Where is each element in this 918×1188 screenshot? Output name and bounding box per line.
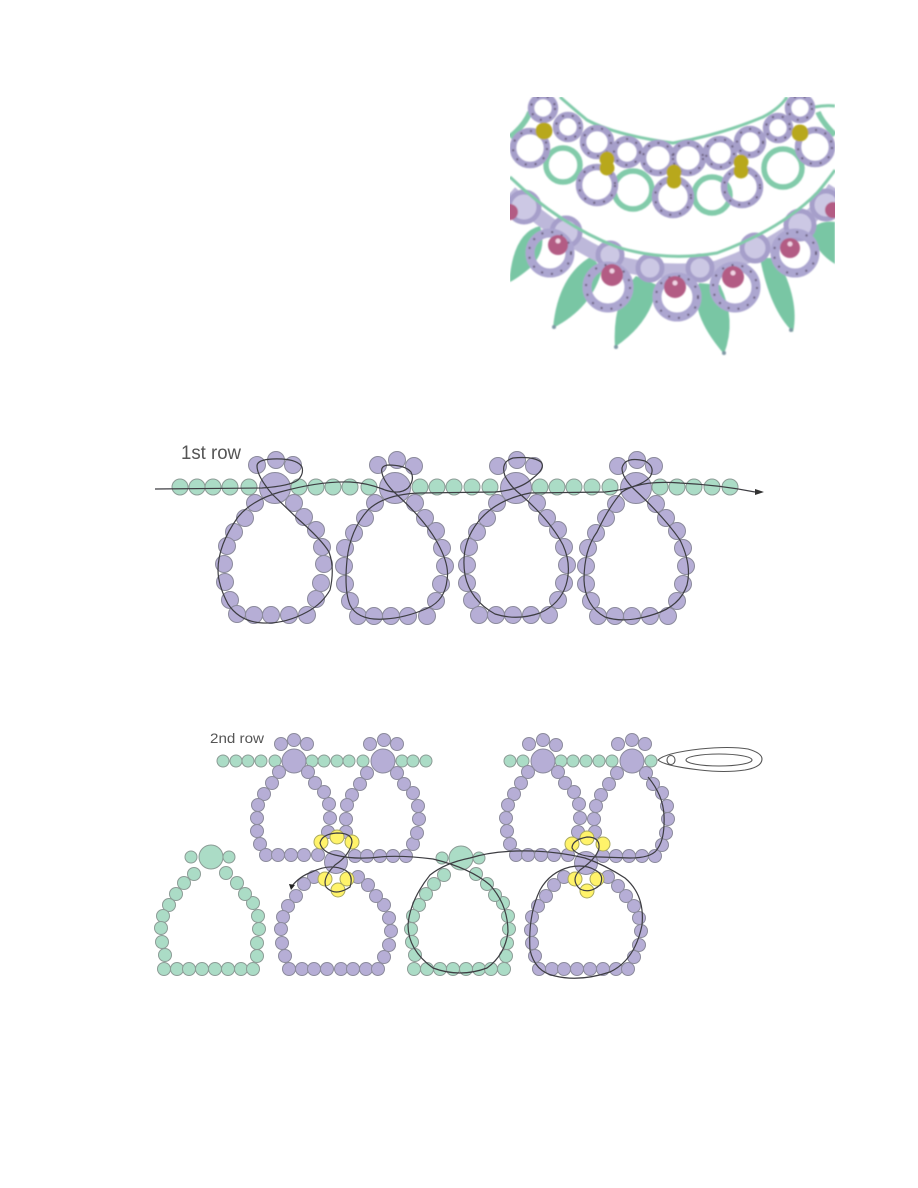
thread path row 1	[155, 458, 755, 623]
lower necklace: lavender rings	[530, 233, 815, 317]
lower green loop right	[404, 846, 516, 976]
lower necklace: leaf tips	[552, 325, 793, 355]
label: 1st row: 1st row	[181, 443, 241, 464]
lower purple loop left	[274, 850, 398, 976]
lower green loop left	[154, 845, 266, 976]
lower necklace: small rings	[509, 191, 840, 280]
purple loop 3	[458, 452, 576, 624]
purple loop 4	[578, 452, 694, 624]
yellow beads right	[565, 831, 610, 898]
diagram: 1st row	[155, 452, 764, 624]
lower purple loop right	[524, 852, 648, 976]
upper necklace: green loops	[510, 112, 835, 213]
upper necklace: green edge thread	[560, 97, 835, 143]
upper necklace: yellow beads	[536, 122, 808, 188]
photo: beaded necklaces	[502, 96, 841, 355]
lower necklace: green thread	[510, 170, 835, 256]
lower necklace: pink pearls	[502, 202, 841, 298]
diagram: 2nd row	[154, 734, 762, 978]
lower necklace: leaves	[510, 222, 835, 354]
top green strand right	[504, 755, 657, 767]
purple upper loops left	[250, 734, 426, 862]
purple upper loops right	[500, 734, 674, 862]
label: 2nd row: 2nd row	[210, 731, 264, 746]
purple loop 2	[336, 452, 454, 624]
top green strand left	[217, 755, 432, 767]
icon: needle	[658, 748, 762, 772]
green horizontal beads	[172, 479, 738, 495]
lower necklace: lavender band	[510, 188, 835, 271]
thread path row 2	[292, 777, 664, 978]
upper necklace: lavender loops	[513, 96, 832, 215]
yellow beads left	[314, 830, 359, 897]
purple loop 1	[216, 452, 332, 624]
arrowhead row 2	[289, 884, 295, 890]
arrowhead row 1	[755, 489, 764, 495]
